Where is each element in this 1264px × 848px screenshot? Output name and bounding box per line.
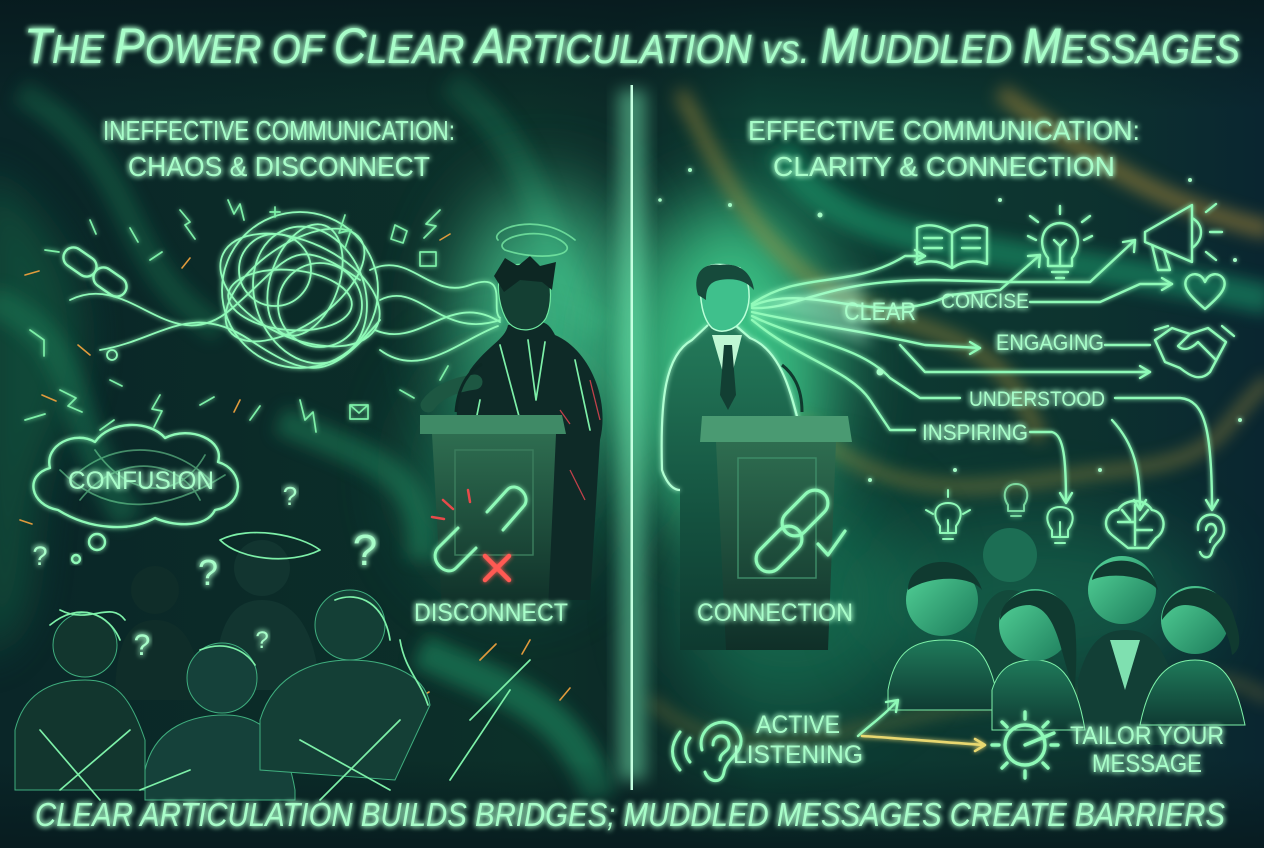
icon: broken chain <box>432 487 526 580</box>
title: THE POWER OF CLEAR ARTICULATION vs. MUDDLED MESSAGES <box>24 18 1240 74</box>
speaker: clear <box>662 264 800 650</box>
icon: bulb <box>1047 507 1073 543</box>
panel: effective communication <box>658 115 1245 781</box>
hair <box>908 561 1239 690</box>
person <box>970 528 1055 680</box>
person <box>215 540 320 690</box>
icon: book <box>917 225 987 268</box>
heading: effective communication: CLARITY & CONNECTION <box>773 151 1115 182</box>
person <box>145 643 295 800</box>
central divider <box>618 85 646 790</box>
labels: qualities: CONCISE <box>941 290 1029 313</box>
confused scribbles and question marks: ? <box>134 629 150 662</box>
icon: linked chain and check <box>751 485 845 577</box>
orange and red sparks <box>20 234 570 770</box>
confusion cloud: CONFUSION <box>68 467 214 495</box>
broken lines <box>40 660 530 800</box>
confused scribbles and question marks: ? <box>255 627 269 654</box>
confused scribbles and question marks: ? <box>198 552 218 593</box>
heading: effective communication <box>748 115 1140 182</box>
confusion cloud <box>33 425 238 563</box>
message flow arrows <box>752 240 1218 510</box>
icon: ear <box>1198 515 1224 557</box>
labels: qualities <box>844 290 1105 445</box>
tailor your message: TAILOR YOUR <box>1070 722 1224 750</box>
active listening: ACTIVE <box>756 711 840 739</box>
podium: left <box>420 364 566 610</box>
confused scribbles and question marks <box>32 481 428 705</box>
confused scribbles and question marks: ? <box>32 541 48 571</box>
person <box>992 589 1085 730</box>
arrow: listening to tailoring <box>862 736 985 751</box>
label: disconnect: DISCONNECT <box>414 599 568 627</box>
small light bulbs <box>926 484 1073 543</box>
icon: gear <box>992 712 1058 778</box>
beam of speech <box>752 275 870 345</box>
icon: handshake <box>1155 326 1234 377</box>
person <box>888 564 1000 710</box>
person <box>1078 556 1175 745</box>
icon: bulb <box>1005 484 1027 516</box>
tailor your message <box>1070 722 1224 778</box>
icon: bulb <box>926 490 970 539</box>
icon: heart <box>1185 274 1225 309</box>
icon: ear with sound waves <box>672 722 741 781</box>
happy audience <box>888 528 1245 745</box>
person <box>15 613 145 790</box>
tailor your message: MESSAGE <box>1092 750 1202 778</box>
heading: ineffective communication <box>103 115 455 182</box>
confused scribbles and question marks: ? <box>353 526 377 575</box>
podium: right <box>700 365 852 650</box>
labels: qualities: INSPIRING <box>922 420 1028 445</box>
labels: qualities: UNDERSTOOD <box>969 388 1105 411</box>
heading: effective communication: EFFECTIVE COMMUNICATION: <box>748 115 1140 146</box>
particles <box>658 168 1242 482</box>
tangled message scribble <box>70 206 500 380</box>
icon: megaphone <box>1145 204 1222 270</box>
icon: light bulb <box>1028 206 1092 278</box>
label: connection: CONNECTION <box>697 599 853 627</box>
heading: ineffective communication: CHAOS & DISCONNECT <box>128 151 430 182</box>
person <box>1140 586 1245 725</box>
active listening <box>672 711 863 781</box>
panel: ineffective communication <box>15 115 603 800</box>
speaker: frustrated <box>428 224 603 600</box>
arrow: listening to audience <box>858 700 898 736</box>
heading: ineffective communication: INEFFECTIVE COMMUNICATION: <box>103 115 455 146</box>
icon: chain <box>60 243 130 301</box>
person <box>260 590 430 780</box>
chaos sparks <box>25 200 448 432</box>
icon: brain <box>1106 501 1164 548</box>
icon: red cross <box>485 556 509 580</box>
labels: qualities: CLEAR <box>844 298 916 326</box>
labels: qualities: ENGAGING <box>996 330 1104 355</box>
person <box>115 566 200 700</box>
confused scribbles and question marks: ? <box>283 481 297 511</box>
confused audience <box>15 481 430 800</box>
active listening: LISTENING <box>733 741 863 769</box>
